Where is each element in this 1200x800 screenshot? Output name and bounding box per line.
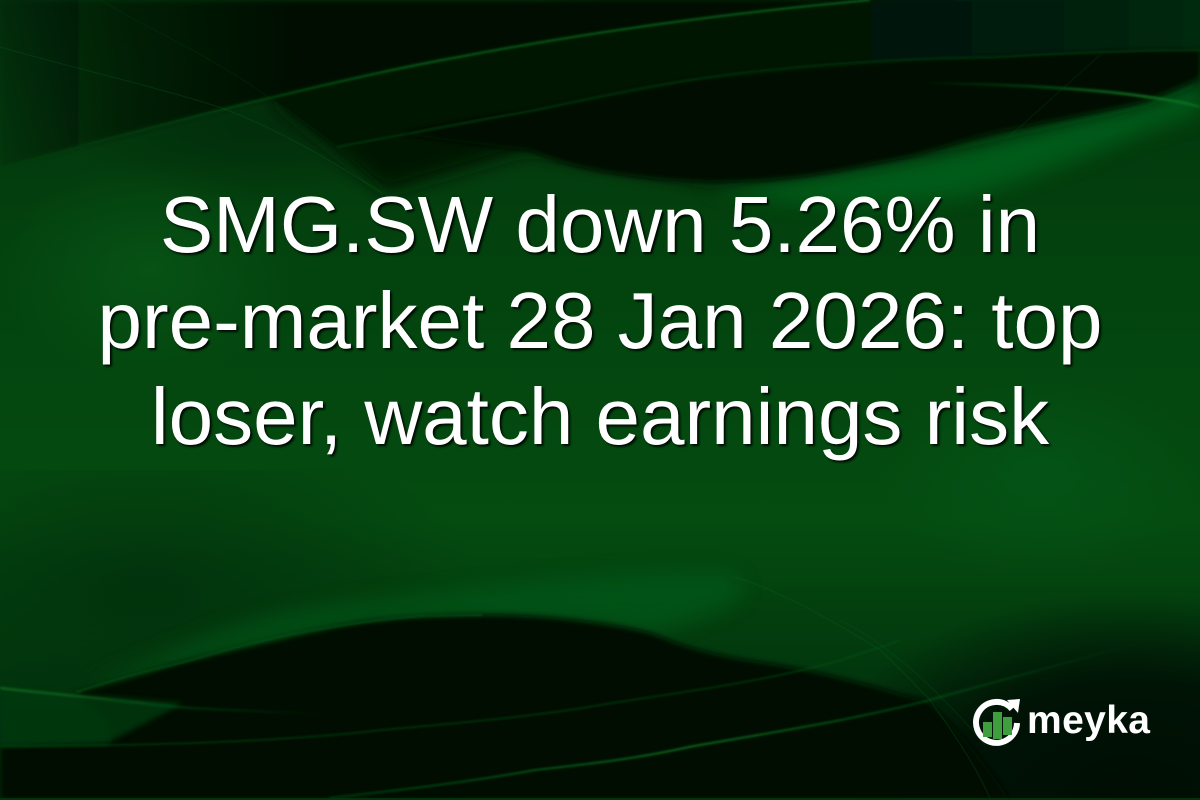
- region between top curves: [268, 0, 1200, 147]
- top dark area above curve A: [0, 0, 870, 168]
- bottom-right vignette: [780, 590, 1200, 800]
- bright streak right: [700, 72, 1200, 206]
- title: [97, 180, 1103, 464]
- bottom wave lines: [0, 577, 1148, 798]
- title: pre-market 28 Jan 2026: top: [97, 276, 1103, 365]
- top wave lines: [0, 0, 1200, 193]
- dark lens: [400, 50, 1200, 182]
- bottom-left wedge: [0, 688, 184, 746]
- dark hump: [0, 615, 1010, 800]
- logo: meyka: [973, 698, 1150, 746]
- title: SMG.SW down 5.26% in: [160, 180, 1040, 269]
- title: loser, watch earnings risk: [151, 372, 1049, 461]
- icon: chart in circular arrow: [976, 699, 1020, 743]
- soft shadow under top curve: [268, 0, 1200, 192]
- bottom wave band: [76, 573, 742, 692]
- wordmark: meyka: [1027, 699, 1150, 742]
